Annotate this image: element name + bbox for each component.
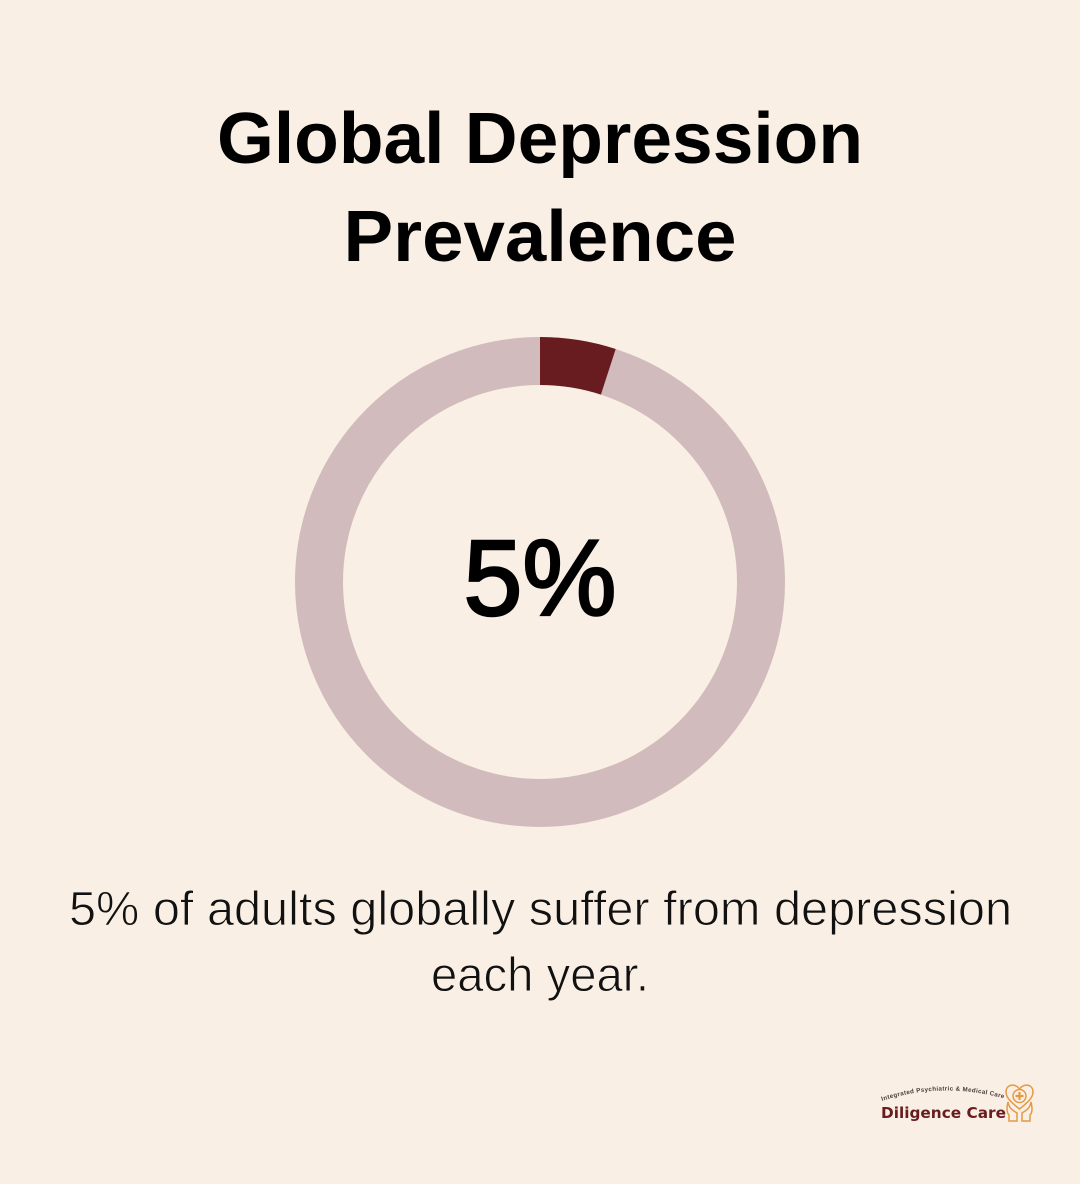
description: 5% of adults globally suffer from depression — [69, 883, 1012, 936]
center value: 5% — [464, 517, 616, 638]
logo wordmark: Diligence Care — [881, 1104, 1006, 1122]
title — [217, 99, 863, 277]
donut highlighted segment — [540, 337, 616, 395]
logo icon: heart and hands — [1006, 1085, 1033, 1121]
title: Global Depression — [217, 99, 863, 179]
donut chart: 5 percent — [319, 337, 761, 803]
donut track — [319, 361, 761, 803]
logo tagline — [882, 1090, 1006, 1101]
logo: Diligence Care: Integrated Psychiatric & Medical Care — [881, 1086, 1004, 1101]
title: Prevalence — [344, 197, 736, 277]
description — [69, 883, 1012, 1002]
logo: Diligence Care — [881, 1084, 1034, 1122]
description: each year. — [431, 949, 649, 1002]
